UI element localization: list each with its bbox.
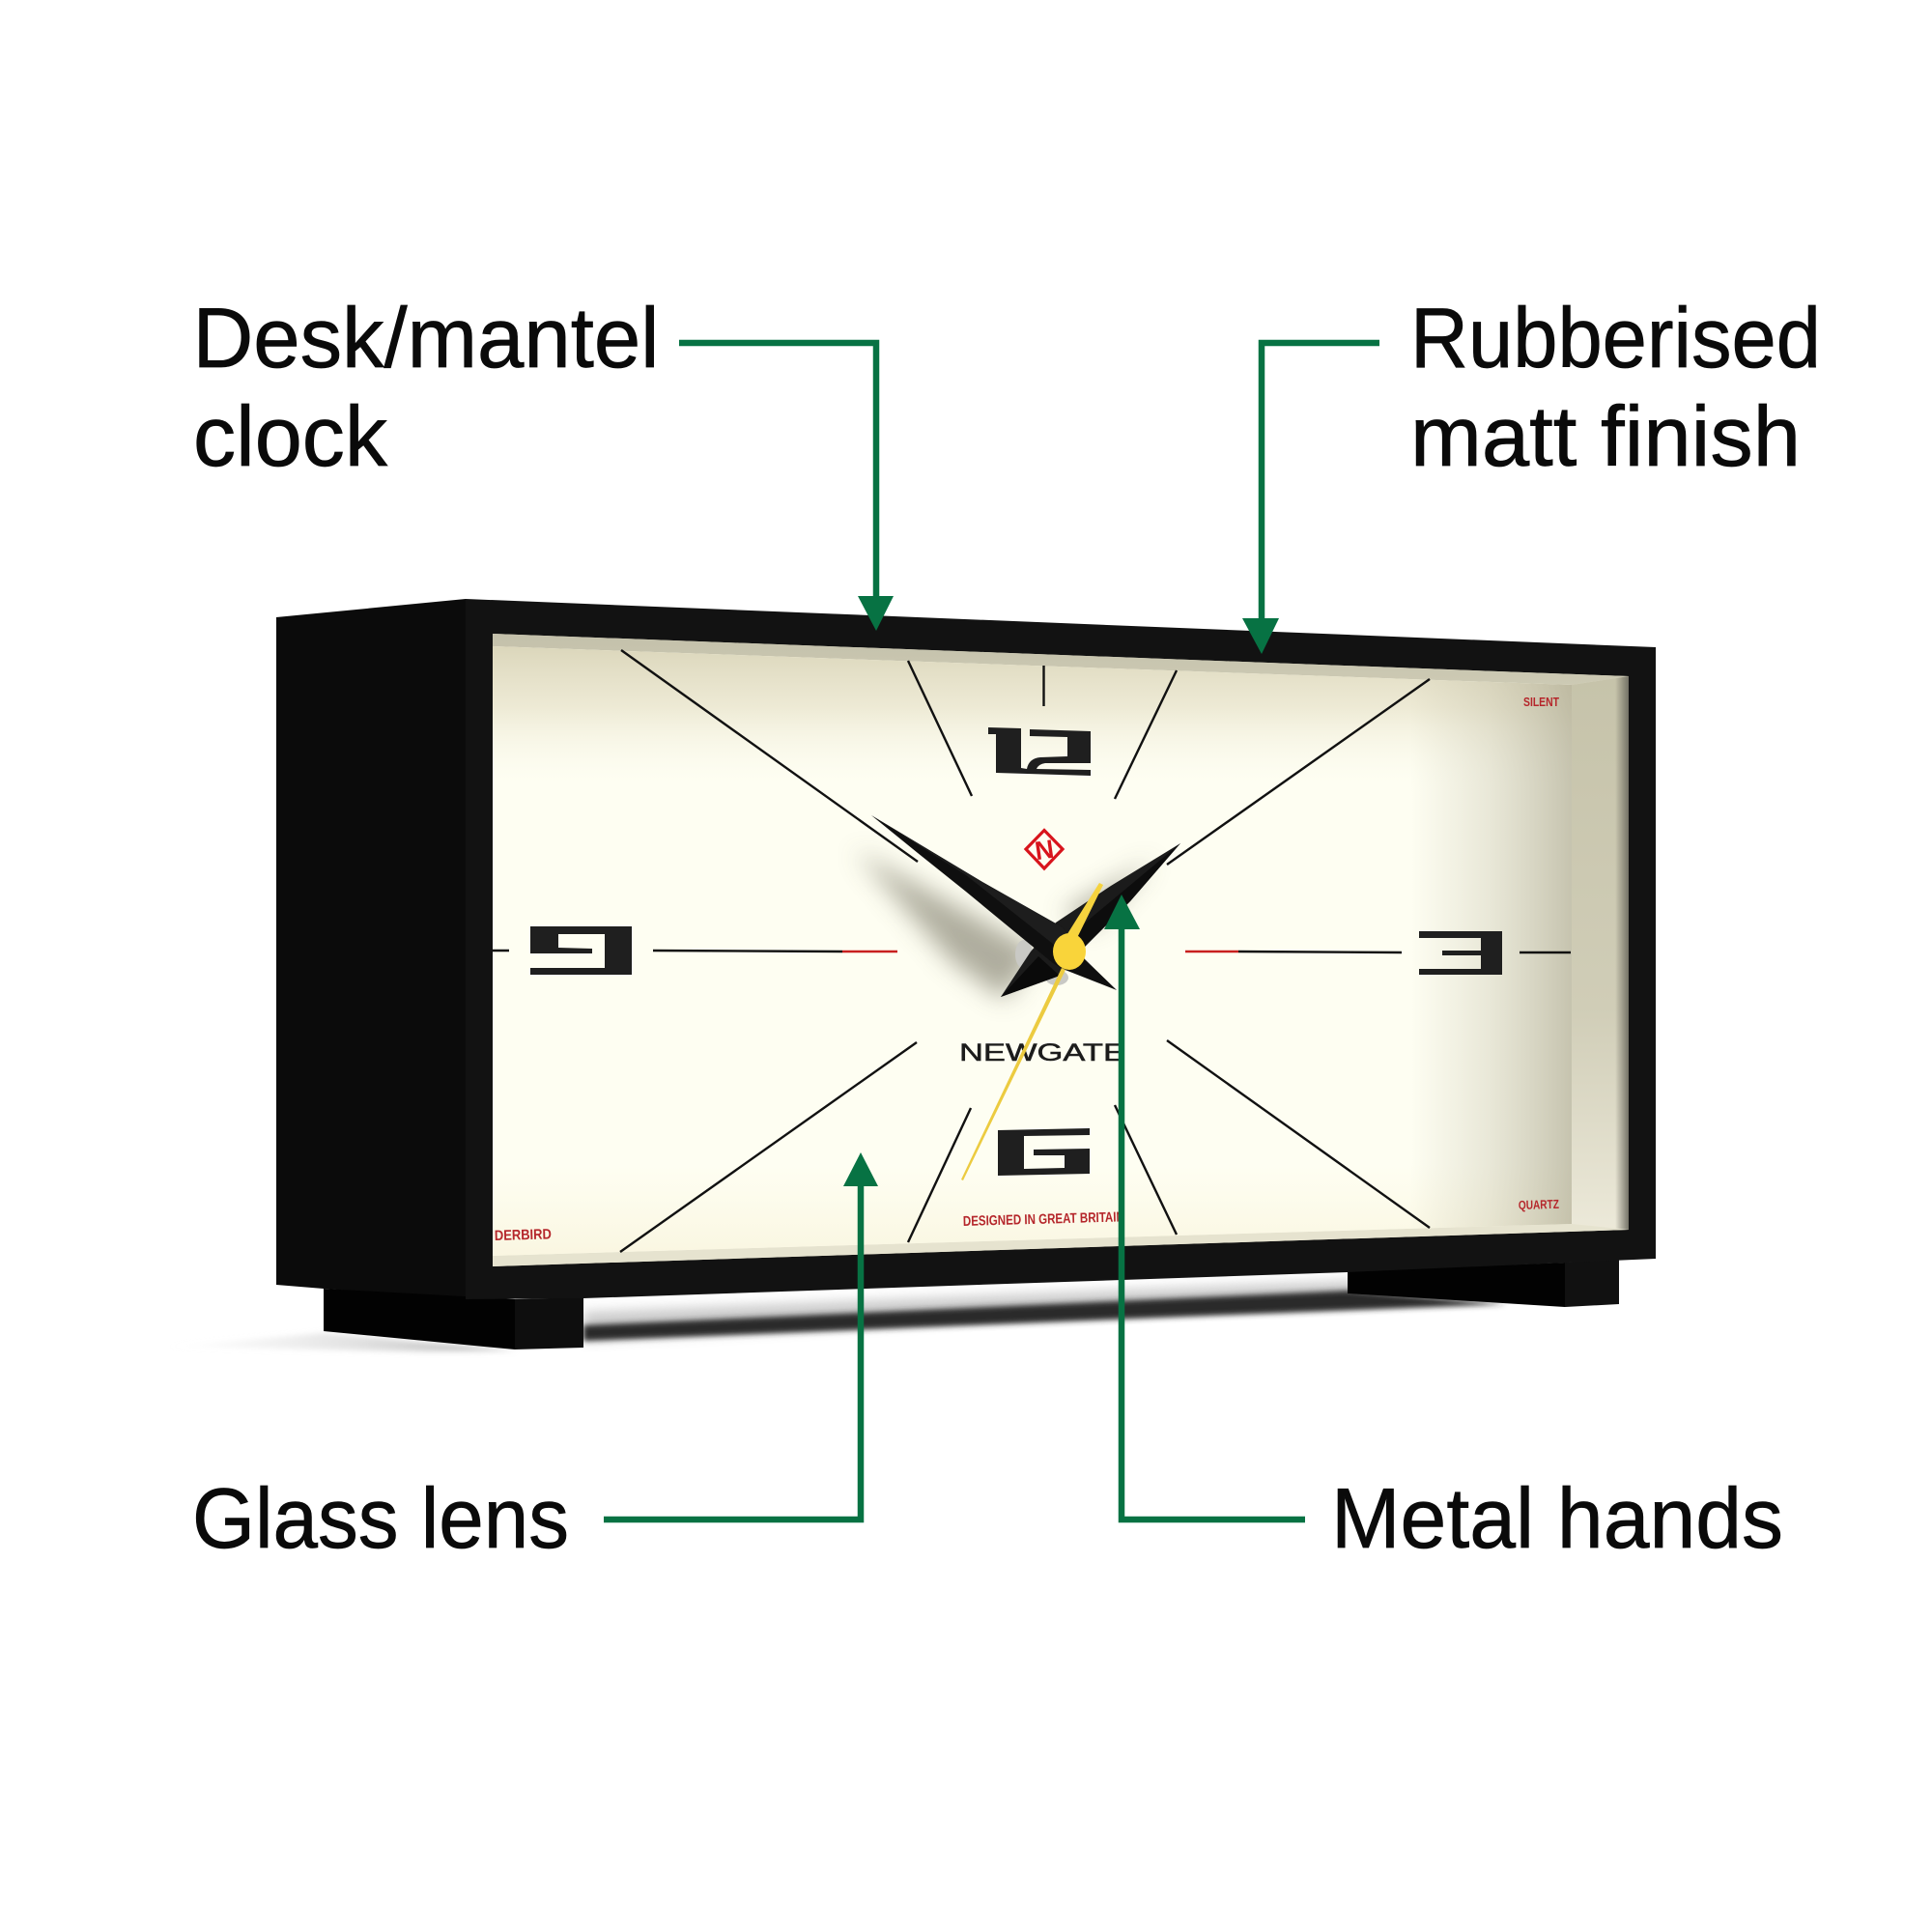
connector xyxy=(1262,343,1379,626)
numeral 12 xyxy=(988,727,1091,776)
callout: metal hands xyxy=(1104,895,1783,1566)
label xyxy=(1410,290,1821,484)
recess top band xyxy=(493,634,1629,685)
small print: quartz: QUARTZ xyxy=(1519,1197,1559,1212)
callout: desk/mantel clock xyxy=(193,290,894,631)
arrow xyxy=(1104,895,1140,929)
red tick accents xyxy=(842,951,1238,952)
minute hand xyxy=(871,815,1117,990)
small print: designed in great britain: DESIGNED IN GREAT BRITAIN xyxy=(963,1209,1124,1230)
arrow xyxy=(843,1152,878,1186)
recess lower band xyxy=(493,1224,1629,1266)
right wall xyxy=(1572,676,1629,1230)
arrow xyxy=(858,596,894,631)
second hand xyxy=(961,883,1103,1180)
label: Metal hands xyxy=(1331,1470,1783,1566)
clock body xyxy=(276,599,1656,1350)
brand name: NEWGATE xyxy=(959,1039,1125,1066)
numeral 6 xyxy=(998,1128,1090,1176)
clock dial xyxy=(493,646,1572,1256)
numeral 9 xyxy=(530,926,632,975)
right foot xyxy=(1348,1259,1619,1307)
dial face xyxy=(493,646,1572,1256)
small print: model name: DERBIRD xyxy=(495,1226,552,1244)
left foot xyxy=(324,1289,583,1350)
dial tick lines xyxy=(493,650,1571,1252)
callout: rubberised matt finish xyxy=(1242,290,1821,654)
hand shadows xyxy=(855,850,1154,1000)
arrow xyxy=(1242,618,1279,654)
callout: glass lens xyxy=(192,1152,878,1566)
clock recess xyxy=(493,634,1629,1266)
label: Rubberised xyxy=(1410,290,1821,385)
logo: red diamond N: N xyxy=(1033,835,1056,866)
hour hand xyxy=(1001,843,1180,997)
label: clock xyxy=(193,388,388,484)
label: Desk/mantel xyxy=(193,290,659,385)
label: matt finish xyxy=(1410,388,1801,484)
label: Glass lens xyxy=(192,1470,569,1566)
connector xyxy=(1122,923,1305,1520)
connector xyxy=(604,1179,861,1520)
label xyxy=(193,290,659,484)
silver spindle xyxy=(1015,940,1068,985)
hand centre cap xyxy=(1053,933,1086,970)
numeral 3 xyxy=(1419,931,1502,975)
connector xyxy=(679,343,876,604)
clock side panel xyxy=(276,599,466,1299)
recess surround xyxy=(493,634,1629,1266)
ground shadow xyxy=(164,1281,1507,1351)
logo: red diamond N xyxy=(1026,831,1063,868)
clock front frame xyxy=(466,599,1656,1299)
small print: silent: SILENT xyxy=(1523,695,1559,709)
